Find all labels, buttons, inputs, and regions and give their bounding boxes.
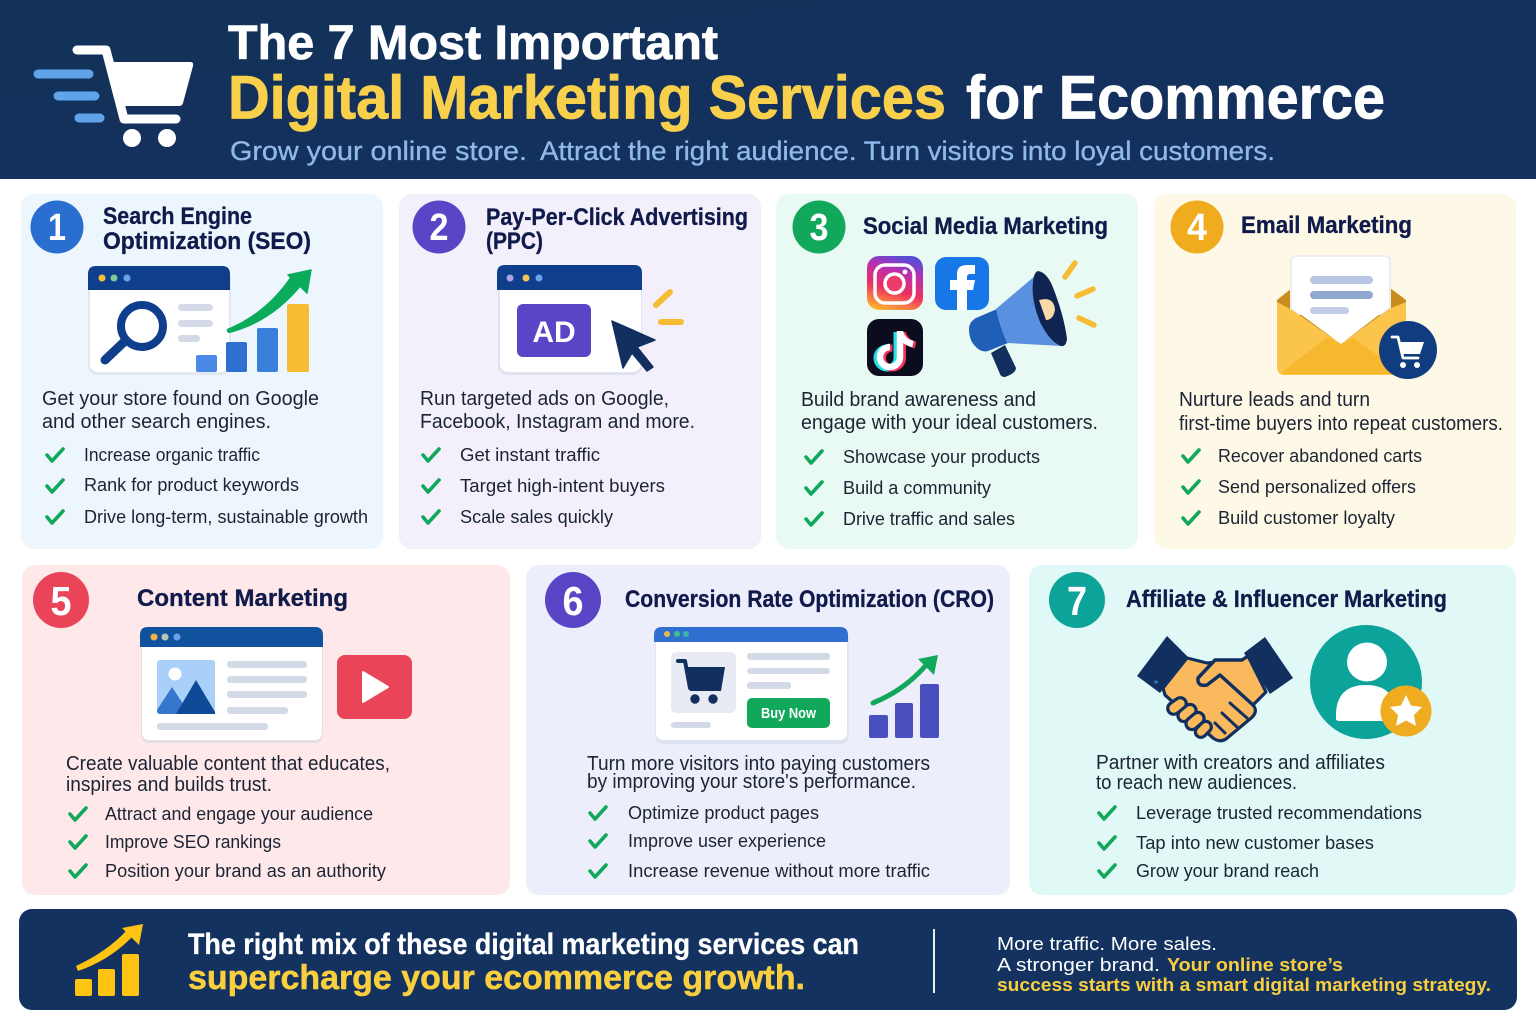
panel: 4 Email (1154, 194, 1516, 549)
number badge 6 (545, 572, 601, 628)
panel: 1 SEO (21, 194, 383, 549)
checklist: Target high-intent buyers (460, 475, 665, 496)
checklist: Scale sales quickly (460, 506, 614, 527)
description: Run targeted ads on Google, (420, 388, 669, 410)
checklist (806, 446, 1040, 529)
footer side text: A stronger brand. (997, 954, 1160, 975)
description (42, 388, 319, 433)
description: Create valuable content that educates, (66, 753, 390, 775)
description (1096, 752, 1385, 794)
checklist (47, 444, 368, 527)
number badge 6: 6 (562, 578, 584, 624)
icon: megaphone (969, 263, 1094, 377)
description: Partner with creators and affiliates (1096, 752, 1385, 774)
number badge 4 (1170, 200, 1224, 254)
icon: growth chart (869, 655, 939, 738)
footer side text: More traffic. More sales. (997, 933, 1217, 954)
footer side text (997, 933, 1491, 995)
heading: Optimization (SEO) (103, 228, 311, 255)
checklist (1099, 802, 1422, 881)
icon: video play (337, 655, 412, 719)
description: engage with your ideal customers. (801, 412, 1098, 434)
title line 2 end: for Ecommerce (966, 64, 1385, 132)
icon: browser with magnifier and growth chart (88, 266, 311, 375)
checklist: Drive traffic and sales (843, 508, 1015, 529)
description (1179, 389, 1503, 435)
checklist: Attract and engage your audience (105, 803, 373, 824)
description: by improving your store's performance. (587, 771, 916, 793)
description: Nurture leads and turn (1179, 389, 1370, 411)
footer side text: Your online store’s (1167, 954, 1343, 975)
footer headline highlight: supercharge your ecommerce growth. (188, 959, 805, 997)
description (587, 753, 930, 793)
checklist: Rank for product keywords (84, 474, 299, 495)
number badge 1 (30, 200, 84, 254)
icon: envelope with cart badge (1277, 255, 1437, 379)
heading: Content Marketing (137, 585, 348, 612)
number badge 7: 7 (1067, 578, 1087, 624)
icon: rising bars and arrow (75, 924, 143, 996)
description: Facebook, Instagram and more. (420, 411, 695, 433)
description: and other search engines. (42, 411, 271, 433)
number badge 3: 3 (810, 207, 828, 249)
number badge 5 (33, 572, 89, 628)
description (420, 388, 695, 433)
icon: article browser (140, 627, 323, 743)
heading (103, 203, 311, 255)
number badge 1: 1 (48, 207, 66, 249)
panel: 6 CRO (526, 565, 1010, 895)
number badge 2 (412, 200, 466, 254)
description: Turn more visitors into paying customers (587, 753, 930, 775)
footer banner (19, 909, 1517, 1010)
description: Get your store found on Google (42, 388, 319, 410)
checklist (1183, 445, 1422, 528)
icon: ad browser with cursor (497, 265, 681, 375)
checklist: Grow your brand reach (1136, 860, 1319, 881)
header banner (0, 0, 1536, 179)
footer side text: success starts with a smart digital marketing strategy. (997, 974, 1491, 995)
checklist: Tap into new customer bases (1136, 832, 1374, 853)
description: Build brand awareness and (801, 389, 1036, 411)
panel: 2 PPC (399, 194, 761, 549)
icon: store page browser (654, 627, 849, 744)
title line 2 highlight: Digital Marketing Services (228, 64, 946, 132)
panel: 5 Content (22, 565, 510, 895)
panel: 3 Social (776, 194, 1138, 549)
button: buy now: Buy Now (761, 705, 816, 722)
heading: (PPC) (486, 228, 543, 255)
checklist: Leverage trusted recommendations (1136, 802, 1422, 823)
checklist: Improve user experience (628, 830, 826, 851)
number badge 7 (1049, 572, 1105, 628)
title line 1: The 7 Most Important (228, 17, 718, 70)
icon: instagram (867, 256, 923, 310)
icon: shopping cart with speed lines (38, 50, 193, 147)
heading (486, 204, 748, 255)
checklist: Recover abandoned carts (1218, 445, 1422, 466)
button: buy now (747, 698, 830, 728)
icon: handshake (1137, 636, 1293, 741)
checklist: Increase revenue without more traffic (628, 860, 930, 881)
checklist: Build a community (843, 477, 992, 498)
subtitle end: Attract the right audience. Turn visitors into loyal customers. (540, 136, 1275, 166)
checklist: Send personalized offers (1218, 476, 1416, 497)
heading: Email Marketing (1241, 212, 1412, 239)
number badge 3 (792, 200, 846, 254)
description: inspires and builds trust. (66, 774, 272, 796)
checklist: Improve SEO rankings (105, 831, 281, 852)
heading: Affiliate & Influencer Marketing (1126, 586, 1447, 613)
subtitle start: Grow your online store. (230, 136, 527, 166)
checklist (423, 444, 665, 527)
number badge 5: 5 (50, 578, 72, 624)
checklist: Build customer loyalty (1218, 507, 1396, 528)
checklist: Increase organic traffic (84, 444, 260, 465)
number badge 4: 4 (1187, 207, 1207, 249)
icon: influencer avatar with star (1310, 625, 1432, 739)
number badge 2: 2 (430, 207, 448, 249)
description: to reach new audiences. (1096, 772, 1297, 794)
description: first-time buyers into repeat customers. (1179, 413, 1503, 435)
checklist (70, 803, 387, 881)
checklist: Optimize product pages (628, 802, 819, 823)
checklist: Position your brand as an authority (105, 860, 387, 881)
checklist: Showcase your products (843, 446, 1040, 467)
heading: Search Engine (103, 203, 252, 230)
icon: ad browser with cursor: AD (532, 316, 576, 349)
footer headline: The right mix of these digital marketing services can (188, 928, 859, 961)
panel: 7 Affiliate (1029, 565, 1516, 895)
checklist (590, 802, 930, 881)
heading: Conversion Rate Optimization (CRO) (625, 586, 994, 613)
description (66, 753, 390, 796)
checklist: Drive long-term, sustainable growth (84, 506, 368, 527)
icon: facebook (935, 257, 989, 310)
icon: tiktok (867, 319, 923, 376)
heading: Social Media Marketing (863, 213, 1108, 240)
checklist: Get instant traffic (460, 444, 600, 465)
description (801, 389, 1098, 434)
divider (933, 929, 935, 993)
heading: Pay-Per-Click Advertising (486, 204, 748, 231)
